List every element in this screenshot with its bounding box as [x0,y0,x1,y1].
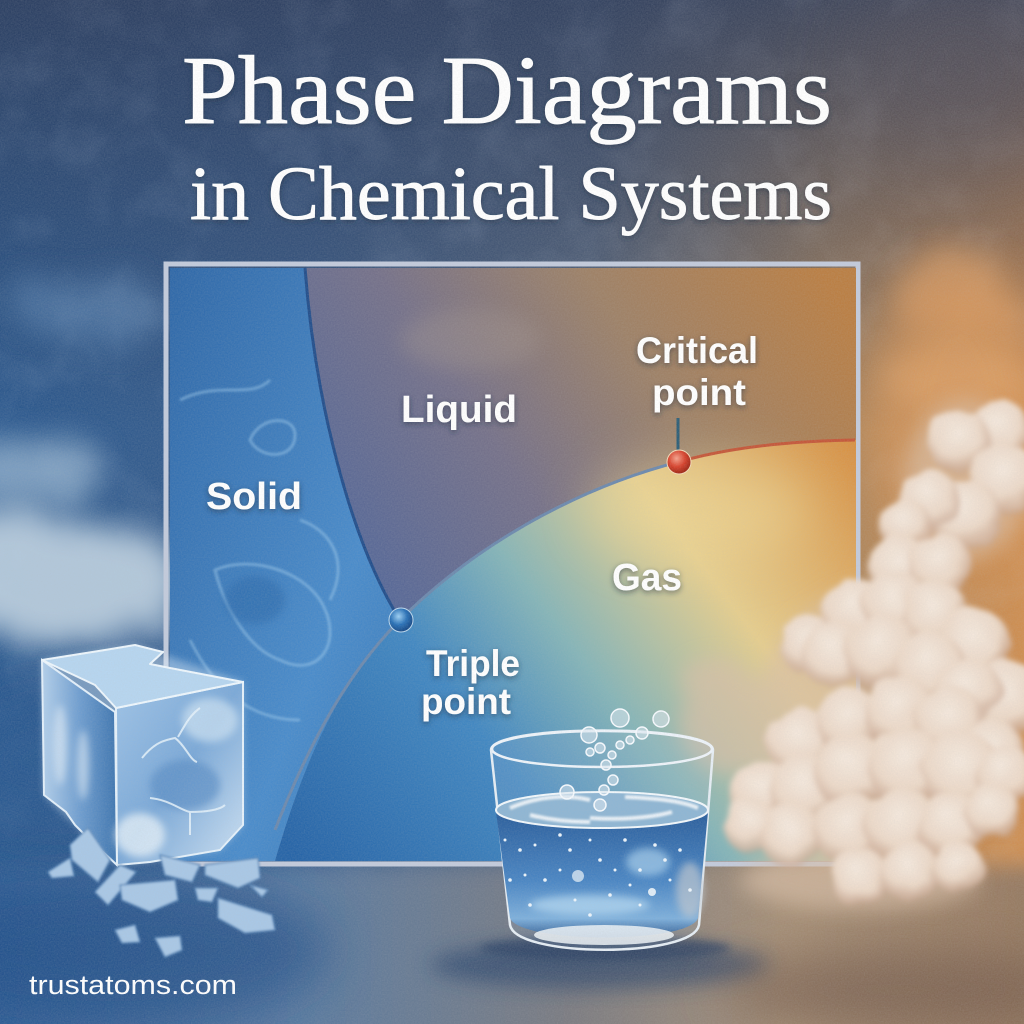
glass body [491,730,713,950]
water light patches [626,848,704,918]
ice shards [48,828,275,957]
glass shadow [480,936,730,960]
cube left streaks [53,705,89,800]
liquid haze [402,314,528,369]
surface ripples [510,797,698,822]
glass rim [492,731,712,767]
panel: phase diagram [166,264,858,864]
region: liquid [305,268,856,620]
water body [496,812,708,938]
water surface [496,792,708,828]
icon: ice cube [42,645,275,957]
curve: solid-liquid boundary [305,268,400,620]
label: critical point: Critical [636,330,758,371]
label: triple point: point [421,681,511,722]
cloud puffs [724,400,1024,908]
cube front face [116,682,243,865]
curve: to critical edge [678,440,855,462]
title: in Chemical Systems [190,152,832,236]
label: triple point: Triple [426,643,520,684]
label: critical point: point [652,372,746,413]
gas glow [590,460,810,560]
water glow [530,895,650,915]
cube top face [42,645,243,708]
cube left face [42,660,117,865]
cube front patches [115,698,238,857]
region: gas [275,440,856,861]
icon: glass of water [480,709,730,960]
leader line [676,418,680,452]
splash [560,709,669,811]
triple point marker [389,608,413,632]
cube glow [42,645,243,865]
glass base [534,925,674,945]
solid texture [180,380,338,720]
bubbles [504,833,692,917]
critical point marker [667,450,691,474]
title [182,37,832,236]
clouds [680,400,1024,910]
label: solid: Solid [206,476,302,518]
footer url: trustatoms.com [29,970,237,1000]
curve: liquid-gas boundary [275,462,678,830]
region: solid [170,268,400,861]
title: Phase Diagrams [182,37,832,144]
cube cracks [142,708,225,835]
cloud haze [680,400,1024,910]
label: gas: Gas [612,557,682,599]
label: liquid: Liquid [401,389,517,431]
